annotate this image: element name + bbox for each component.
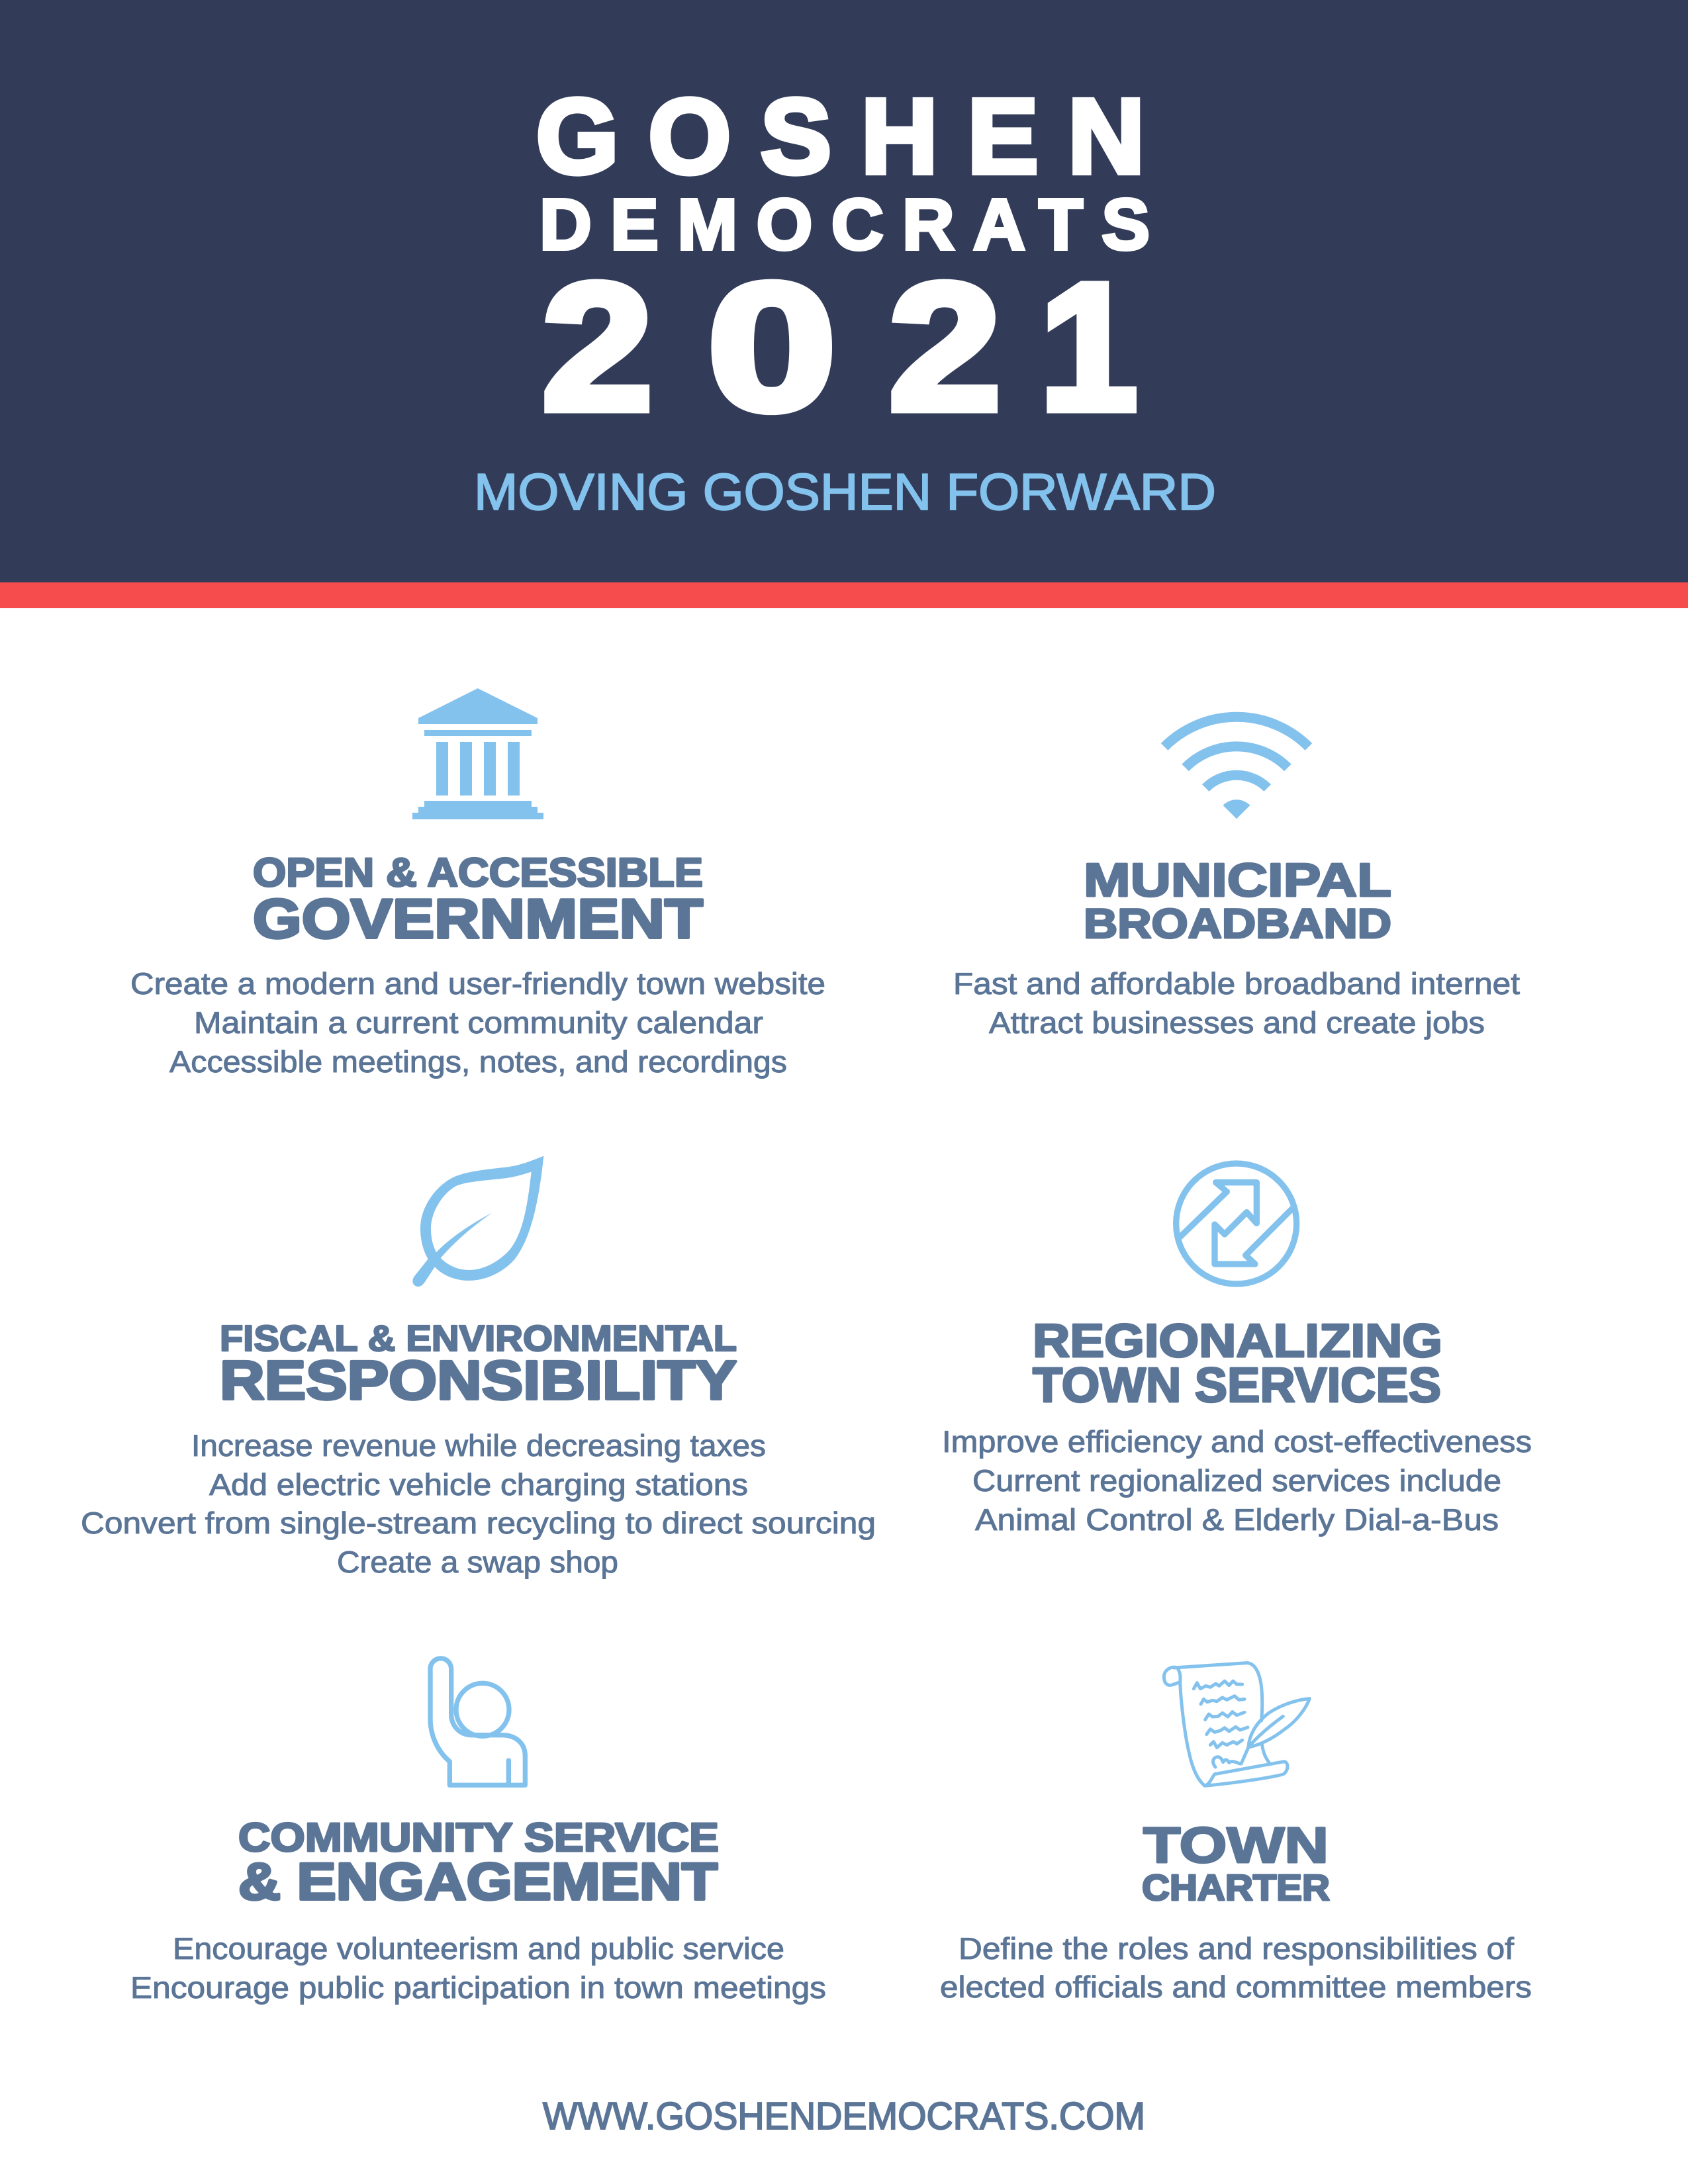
- title: Democrats: DEMOCRATS: [539, 184, 1150, 265]
- body text: Create a swap shop: [337, 1545, 618, 1579]
- heading: GOVERNMENT: [253, 887, 703, 950]
- footer website: WWW.GOSHENDEMOCRATS.COM: [543, 2095, 1145, 2138]
- body text: Accessible meetings, notes, and recordings: [169, 1044, 787, 1079]
- header band: [0, 0, 1688, 582]
- heading: BROADBAND: [1084, 901, 1391, 947]
- body text: Improve efficiency and cost-effectiveness: [942, 1424, 1532, 1459]
- heading: [1142, 1817, 1330, 1908]
- body text: Animal Control & Elderly Dial-a-Bus: [975, 1502, 1499, 1537]
- body text: [942, 1424, 1532, 1537]
- body text: Fast and affordable broadband internet: [953, 966, 1520, 1001]
- body text: [953, 966, 1520, 1040]
- heading: RESPONSIBILITY: [220, 1349, 737, 1411]
- heading: [253, 850, 703, 950]
- body text: elected officials and committee members: [940, 1970, 1532, 2004]
- body text: Current regionalized services include: [972, 1463, 1501, 1498]
- heading: TOWN SERVICES: [1033, 1357, 1441, 1412]
- body text: Encourage public participation in town meetings: [130, 1970, 826, 2005]
- title: 2021: 1: [1040, 246, 1137, 447]
- body text: Define the roles and responsibilities of: [959, 1931, 1514, 1966]
- title: 2021: 0: [708, 246, 836, 447]
- panel: open and accessible government: [130, 688, 825, 1079]
- heading: [238, 1815, 719, 1911]
- heading: TOWN: [1143, 1817, 1329, 1874]
- icon: government building: [412, 688, 543, 819]
- panel: fiscal and environmental responsibility: [81, 1156, 876, 1579]
- heading: [220, 1318, 737, 1411]
- title: Goshen: GOSHEN: [536, 77, 1145, 195]
- body text: Maintain a current community calendar: [194, 1005, 763, 1040]
- heading: & ENGAGEMENT: [238, 1852, 718, 1911]
- tagline: MOVING GOSHEN FORWARD: [474, 463, 1216, 521]
- body text: Increase revenue while decreasing taxes: [191, 1428, 766, 1463]
- icon: scroll and quill: [1164, 1663, 1309, 1786]
- heading: FISCAL & ENVIRONMENTAL: [220, 1318, 737, 1359]
- heading: COMMUNITY SERVICE: [238, 1815, 719, 1860]
- panel: regionalizing town services: [942, 1163, 1532, 1537]
- panel: municipal broadband: [953, 717, 1520, 1040]
- body text: Convert from single-stream recycling to direct sourcing: [81, 1506, 876, 1540]
- heading: [1084, 854, 1391, 947]
- panel: town charter: [940, 1663, 1532, 2004]
- body text: Attract businesses and create jobs: [989, 1005, 1485, 1040]
- body text: [940, 1931, 1532, 2004]
- icon: person raising hand: [430, 1659, 525, 1785]
- red divider band: [0, 582, 1688, 608]
- icon: wifi: [1164, 717, 1309, 819]
- body text: [130, 1931, 826, 2005]
- heading: CHARTER: [1142, 1867, 1330, 1908]
- icon: opposing arrows in circle: [1176, 1163, 1297, 1284]
- title: 2021: 2: [889, 246, 1001, 447]
- heading: OPEN & ACCESSIBLE: [253, 850, 703, 895]
- body text: Encourage volunteerism and public service: [173, 1931, 784, 1966]
- heading: [1033, 1315, 1442, 1412]
- title: 2021: [542, 246, 1137, 447]
- heading: MUNICIPAL: [1084, 854, 1391, 907]
- heading: REGIONALIZING: [1033, 1315, 1442, 1367]
- panel: community service and engagement: [130, 1659, 826, 2005]
- body text: Create a modern and user-friendly town website: [130, 966, 825, 1001]
- icon: leaf: [412, 1156, 543, 1287]
- title: 2021: 2: [542, 246, 653, 447]
- body text: Add electric vehicle charging stations: [209, 1467, 748, 1502]
- body text: [81, 1428, 876, 1579]
- body text: [130, 966, 825, 1079]
